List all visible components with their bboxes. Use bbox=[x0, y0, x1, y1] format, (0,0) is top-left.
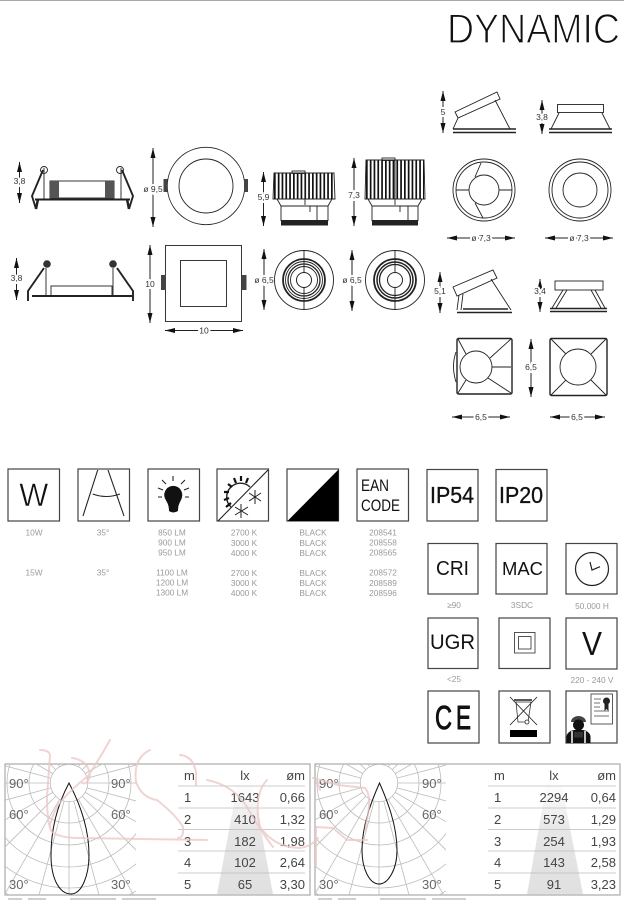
table: right: 91 bbox=[547, 877, 561, 892]
table: left: 3,30 bbox=[280, 877, 305, 892]
table: left: 1,98 bbox=[280, 834, 305, 849]
specification columns: 208541 bbox=[369, 528, 397, 538]
icon: UGR bbox=[428, 618, 478, 684]
drawing: round trim front view bbox=[143, 147, 248, 227]
drawing: fixed square side 3,4: 3,4 bbox=[534, 286, 546, 296]
table: left: 1,32 bbox=[280, 812, 305, 827]
specification columns: BLACK bbox=[299, 548, 327, 558]
drawing: fixture front 2: ø 6,5 bbox=[342, 275, 362, 285]
drawing: round clip side view bbox=[14, 162, 133, 209]
specification columns: 15W bbox=[25, 568, 43, 578]
table: left: lx bbox=[240, 768, 250, 783]
table: right: m bbox=[494, 768, 505, 783]
specification columns: BLACK bbox=[299, 578, 327, 588]
specification columns: 208565 bbox=[369, 548, 397, 558]
drawing: tilted square side 5,1 bbox=[434, 270, 512, 313]
specification columns: 2700 K bbox=[231, 568, 258, 578]
icon: class II bbox=[499, 618, 550, 668]
icon: MAC bbox=[496, 544, 547, 610]
polar chart: right bbox=[315, 764, 446, 895]
table: left: 102 bbox=[234, 855, 256, 870]
specification columns: 4000 K bbox=[231, 548, 258, 558]
icon: EAN code bbox=[357, 469, 408, 521]
icon: voltage: 220 - 240 V bbox=[571, 675, 614, 685]
polar chart: right: 90° bbox=[319, 776, 339, 791]
icon: MAC: MAC bbox=[502, 559, 543, 579]
drawing: square trim front view bbox=[145, 245, 246, 336]
polar chart: left: 60° bbox=[9, 807, 29, 822]
polar chart: left: 90° bbox=[9, 776, 29, 791]
drawing: fixture side 7,3: 7,3 bbox=[348, 190, 360, 200]
drawing: tilted round side 5 bbox=[441, 91, 516, 133]
panel: photometric left bbox=[4, 763, 311, 896]
drawing: fixture front 1: ø 6,5 bbox=[254, 275, 274, 285]
icon: light bulb bbox=[148, 469, 200, 521]
table: right: 0,64 bbox=[591, 790, 616, 805]
specification columns: 900 LM bbox=[158, 538, 186, 548]
drawing: tilted square top view bbox=[452, 338, 512, 422]
table: right: 254 bbox=[543, 834, 565, 849]
drawing: tilted round top view: ø 7,3 bbox=[471, 233, 491, 243]
icon: WEEE bin bbox=[499, 691, 550, 743]
table: right: 1 bbox=[494, 790, 501, 805]
specification columns: 35° bbox=[97, 528, 109, 538]
drawing: fixed round top view bbox=[545, 159, 613, 243]
drawing: square clip side view bbox=[11, 258, 133, 301]
drawing: fixture front 2 bbox=[342, 250, 424, 311]
table: right: 143 bbox=[543, 855, 565, 870]
table: right: 2294 bbox=[540, 790, 568, 805]
icon: colour temperature bbox=[217, 469, 268, 521]
table: left: 5 bbox=[184, 877, 191, 892]
specification columns bbox=[25, 528, 397, 598]
panel: photometric right bbox=[314, 763, 621, 896]
table: right: lx bbox=[549, 768, 559, 783]
table: right: 3,23 bbox=[591, 877, 616, 892]
icon: EAN code: EAN bbox=[361, 476, 389, 495]
drawing: fixed round top view: ø 7,3 bbox=[569, 233, 589, 243]
specification columns: 1300 LM bbox=[156, 588, 188, 598]
drawing: tilted square top view: 6,5 bbox=[475, 412, 487, 422]
icon: IP20: IP20 bbox=[499, 482, 543, 508]
specification columns: 208572 bbox=[369, 568, 397, 578]
polar chart: left: 30° bbox=[111, 877, 131, 892]
icon: IP20 bbox=[496, 470, 547, 521]
drawing: fixed square top view: 6,5 bbox=[525, 362, 537, 372]
specification columns: 35° bbox=[97, 568, 109, 578]
specification columns: 208558 bbox=[369, 538, 397, 548]
icon: CE mark: E bbox=[456, 699, 471, 736]
drawing: fixture side 7,3 bbox=[348, 158, 425, 226]
table: right: 1,93 bbox=[591, 834, 616, 849]
polar chart: left: 90° bbox=[111, 776, 131, 791]
drawing: round clip side view: 3,8 bbox=[14, 176, 26, 186]
specification columns: 3000 K bbox=[231, 538, 258, 548]
specification columns: 10W bbox=[25, 528, 43, 538]
icon: beam angle bbox=[78, 469, 130, 521]
specification columns: 2700 K bbox=[231, 528, 258, 538]
table: left: 3 bbox=[184, 834, 191, 849]
drawing: fixed square side 3,4 bbox=[534, 279, 607, 312]
icon: lifetime clock bbox=[566, 544, 617, 611]
drawing: round trim front view: ø 9,5 bbox=[143, 184, 163, 194]
icon: voltage: V bbox=[582, 625, 602, 662]
icon: EAN code: CODE bbox=[361, 496, 400, 515]
polar chart: right: 30° bbox=[422, 877, 442, 892]
table: right bbox=[488, 768, 616, 894]
icon: wattage: W bbox=[19, 477, 49, 513]
polar chart: right: 90° bbox=[422, 776, 442, 791]
icon: IP54 bbox=[427, 470, 478, 521]
table: left: 1 bbox=[184, 790, 191, 805]
specification columns: 3000 K bbox=[231, 578, 258, 588]
specification columns: 208589 bbox=[369, 578, 397, 588]
drawing: tilted round top view bbox=[447, 159, 515, 243]
table: right: 3 bbox=[494, 834, 501, 849]
drawing: square trim front view: 10 bbox=[145, 279, 155, 289]
drawing: square trim front view: 10 bbox=[199, 326, 209, 336]
table: right: 573 bbox=[543, 812, 565, 827]
drawing: fixed round side 3,8: 3,8 bbox=[536, 112, 548, 122]
polar chart: right: 30° bbox=[319, 877, 339, 892]
icon: finish colour bbox=[287, 469, 338, 521]
table: left: 0,66 bbox=[280, 790, 305, 805]
polar chart: left: 60° bbox=[111, 807, 131, 822]
icon: IP54: IP54 bbox=[430, 482, 474, 508]
icon: installer and certificate bbox=[566, 691, 617, 743]
table: left: 182 bbox=[234, 834, 256, 849]
specification columns: 950 LM bbox=[158, 548, 186, 558]
drawing: fixed square top view: 6,5 bbox=[571, 412, 583, 422]
icon: CRI: ≥90 bbox=[447, 600, 461, 610]
table: left: m bbox=[184, 768, 195, 783]
watermark: pink calligraphy bbox=[40, 740, 369, 866]
drawing: fixture front 1 bbox=[254, 249, 334, 310]
icon: CE mark bbox=[428, 691, 479, 743]
icon: UGR: <25 bbox=[447, 674, 461, 684]
icon: CE mark: C bbox=[435, 699, 452, 736]
polar chart: right: 60° bbox=[319, 807, 339, 822]
table: left: 2 bbox=[184, 812, 191, 827]
table: left: 4 bbox=[184, 855, 191, 870]
table: left: 2,64 bbox=[280, 855, 305, 870]
specification columns: 1100 LM bbox=[156, 568, 188, 578]
drawing: tilted round side 5: 5 bbox=[441, 107, 446, 117]
specification columns: 1200 LM bbox=[156, 578, 188, 588]
icon: CRI: CRI bbox=[436, 558, 469, 580]
table: right: 2,58 bbox=[591, 855, 616, 870]
specification columns: BLACK bbox=[299, 528, 327, 538]
specification columns: BLACK bbox=[299, 588, 327, 598]
table: left: 1643 bbox=[231, 790, 259, 805]
polar chart: left: 30° bbox=[9, 877, 29, 892]
table: right: øm bbox=[597, 768, 616, 783]
specification columns: BLACK bbox=[299, 568, 327, 578]
icon: CRI bbox=[428, 544, 478, 610]
icon: wattage bbox=[8, 469, 60, 521]
table: left: øm bbox=[286, 768, 305, 783]
footnote remnants bbox=[8, 898, 466, 900]
drawing: fixed round side 3,8 bbox=[536, 100, 612, 134]
specification columns: 208596 bbox=[369, 588, 397, 598]
table: right: 2 bbox=[494, 812, 501, 827]
icon: MAC: 3SDC bbox=[511, 600, 533, 610]
specification columns: 4000 K bbox=[231, 588, 258, 598]
polar chart: left bbox=[5, 764, 136, 895]
drawing: square clip side view: 3,8 bbox=[11, 273, 23, 283]
table: right: 1,29 bbox=[591, 812, 616, 827]
drawing: fixed square top view bbox=[525, 338, 607, 422]
icon: lifetime clock: 50.000 H bbox=[575, 601, 609, 611]
table: left: 65 bbox=[238, 877, 252, 892]
icon: UGR: UGR bbox=[430, 631, 475, 654]
drawing: fixture side 5,9 bbox=[258, 171, 335, 226]
drawing: tilted square side 5,1: 5,1 bbox=[434, 286, 446, 296]
specification columns: BLACK bbox=[299, 538, 327, 548]
specification columns: 850 LM bbox=[158, 528, 186, 538]
polar chart: right: 60° bbox=[422, 807, 442, 822]
drawing: fixture side 5,9: 5,9 bbox=[258, 192, 270, 202]
table: left bbox=[178, 768, 305, 894]
icon: voltage bbox=[566, 618, 617, 685]
table: right: 4 bbox=[494, 855, 501, 870]
table: right: 5 bbox=[494, 877, 501, 892]
table: left: 410 bbox=[234, 812, 256, 827]
